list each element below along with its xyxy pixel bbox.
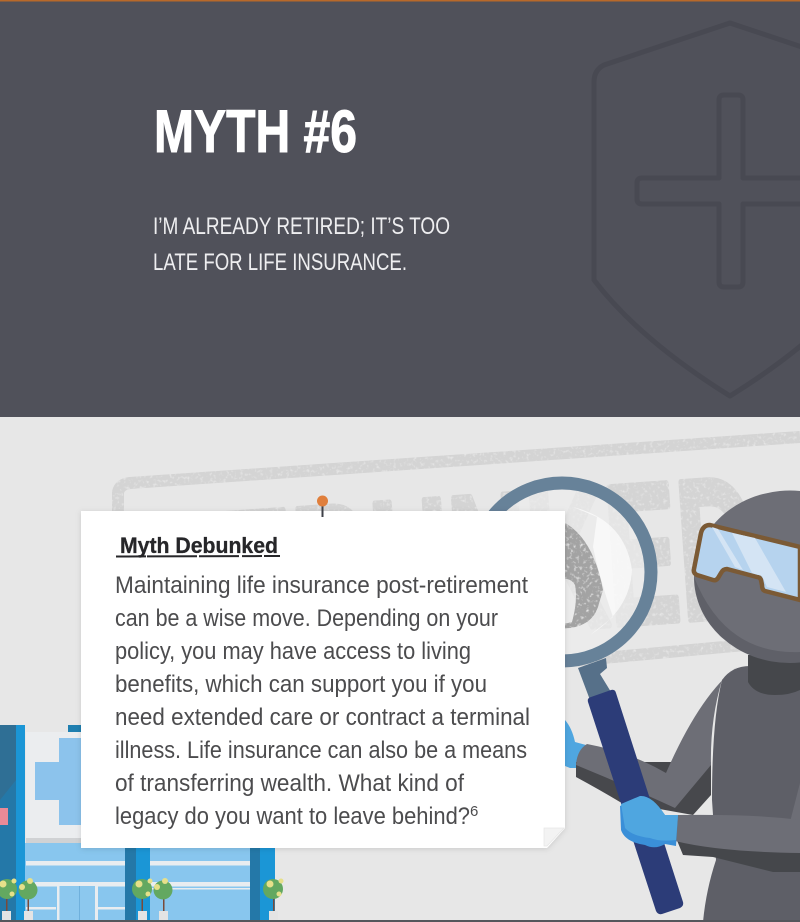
trees [0,878,284,920]
myth statement: I’M ALREADY RETIRED; IT’S TOO [153,213,450,240]
bottom edge line [0,920,800,922]
card body text: 6 [470,803,478,820]
building wall [26,732,276,842]
rear arm underside [576,762,711,815]
store stripes [0,861,255,910]
pink sign [0,808,8,825]
icon: shield with cross outline [594,23,800,396]
myth statement [153,213,450,276]
right pillar [250,845,275,920]
goggle highlights [712,527,786,592]
front arm underside [676,838,800,872]
goggles [694,525,800,600]
neck [748,655,800,695]
hospital building [0,725,284,920]
handle neck [578,658,611,700]
goggle frame and lens [694,525,800,600]
left pillar [0,725,25,920]
magnified stamp letter [565,523,603,628]
folded corner [544,828,564,846]
front arm and hand [620,796,800,872]
rear arm [576,667,737,808]
head [694,491,800,663]
building sign band [68,725,108,732]
lower background panel [0,417,800,922]
lens highlight [573,507,632,635]
door [57,886,98,920]
lens ring [473,483,651,661]
front hand [620,796,678,847]
torso [703,666,800,922]
roof shadow band [26,838,276,844]
myth debunked card [81,496,565,848]
card sheet [81,511,565,848]
myth statement: LATE FOR LIFE INSURANCE. [153,249,407,276]
lens [506,491,644,634]
card body text: of transferring wealth. What kind of [115,770,464,797]
header panel [0,0,800,417]
front arm [675,815,800,853]
inspector figure [565,491,800,922]
title: MYTH #6 [154,98,357,165]
rear hand [565,720,586,768]
chest highlight [790,783,800,822]
card body text: need extended care or contract a terminal [115,704,530,731]
glass storefront [0,843,250,920]
card body text: Maintaining life insurance post-retirement [115,572,528,599]
card body text: can be a wise move. Depending on your [115,605,498,632]
card body text: benefits, which can support you if you [115,671,487,698]
pin [317,496,328,517]
card body text [115,572,530,830]
magnifying glass [472,482,683,914]
card body text: illness. Life insurance can also be a means [115,737,527,764]
card heading: Myth Debunked [120,533,278,558]
middle pillar [125,845,150,920]
handle [588,690,683,914]
card body text: legacy do you want to leave behind? [115,803,470,830]
card body text: policy, you may have access to living [115,638,471,665]
medical cross [35,738,120,825]
